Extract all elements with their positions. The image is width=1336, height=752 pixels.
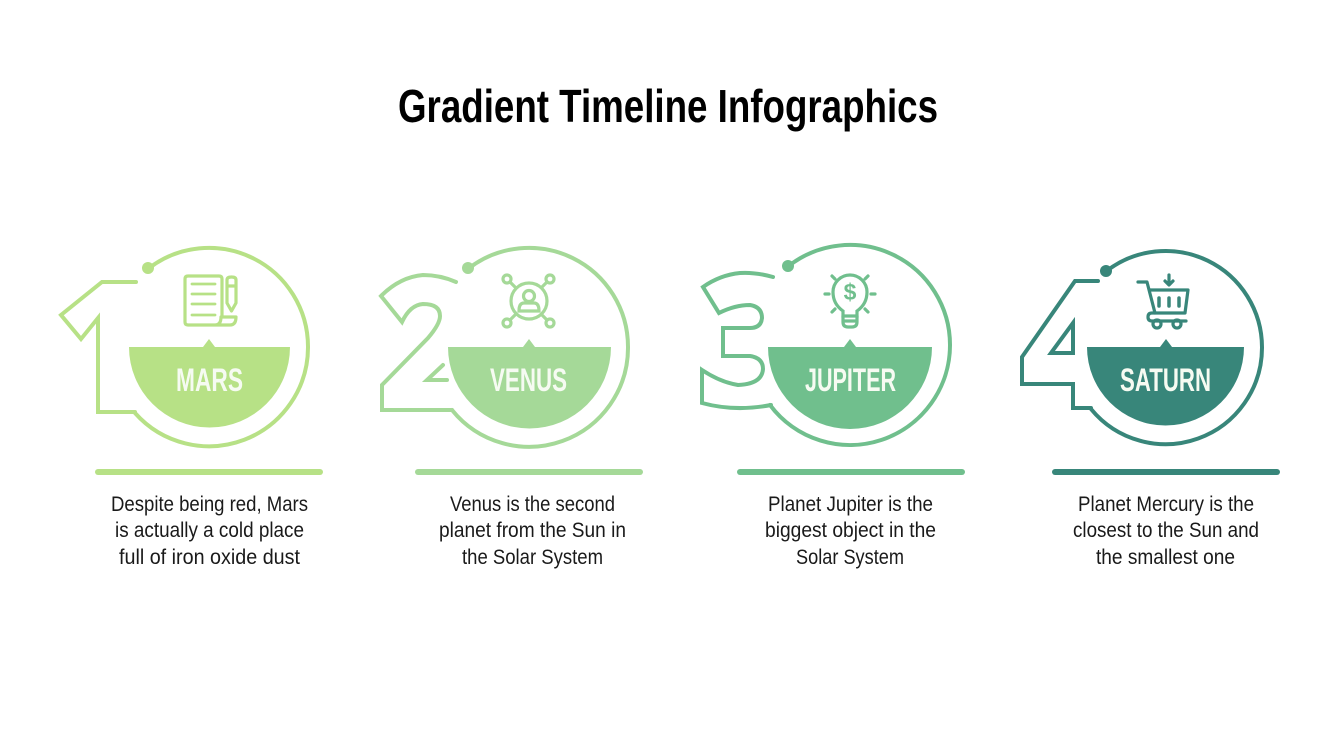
description: Saturn: closest to the Sun and: [1073, 519, 1259, 542]
description: Venus: the Solar System: [462, 546, 603, 569]
description: Venus: Venus is the second: [450, 493, 615, 516]
divider bar: [415, 469, 643, 475]
semicircle label: JUPITER: JUPITER: [805, 362, 896, 398]
semicircle label: SATURN: SATURN: [1120, 362, 1211, 398]
panel: Saturn: [1022, 251, 1280, 569]
numeral 2 with ring outline: [381, 248, 628, 447]
panel: Jupiter: [702, 245, 965, 569]
description: Venus: planet from the Sun in: [439, 519, 626, 542]
divider bar: [737, 469, 965, 475]
description: Mars: full of iron oxide dust: [119, 546, 300, 569]
semicircle label: JUPITER: [768, 339, 932, 429]
description: Mars: [111, 493, 308, 569]
description: Venus: [439, 493, 626, 569]
numeral 4 with ring outline: [1022, 251, 1262, 444]
description: Jupiter: [765, 493, 936, 569]
divider bar: [1052, 469, 1280, 475]
semicircle label: SATURN: [1087, 339, 1244, 426]
icon: notes and pencil: [185, 276, 236, 325]
icon: dollar light bulb: $: [844, 279, 857, 305]
icon: dollar light bulb: [825, 275, 875, 327]
icon: shopping cart: [1138, 275, 1188, 328]
description: Jupiter: biggest object in the: [765, 519, 936, 542]
description: Saturn: the smallest one: [1096, 546, 1235, 569]
title: Gradient Timeline Infographics: [398, 80, 938, 132]
divider bar: [95, 469, 323, 475]
semicircle label: MARS: MARS: [176, 362, 243, 398]
description: Mars: Despite being red, Mars: [111, 493, 308, 516]
description: Mars: is actually a cold place: [115, 519, 304, 542]
numeral 3 with ring outline: [702, 245, 950, 445]
numeral 1 with ring outline: [61, 248, 308, 446]
description: Saturn: [1073, 493, 1259, 569]
description: Jupiter: Planet Jupiter is the: [768, 493, 933, 516]
icon: person network: [503, 275, 554, 327]
semicircle label: VENUS: VENUS: [490, 362, 567, 398]
semicircle label: VENUS: [448, 339, 611, 428]
semicircle label: MARS: [129, 339, 290, 428]
description: Jupiter: Solar System: [796, 546, 904, 569]
description: Saturn: Planet Mercury is the: [1078, 493, 1254, 516]
panel: Venus: [381, 248, 643, 569]
panel: Mars: [61, 248, 323, 569]
